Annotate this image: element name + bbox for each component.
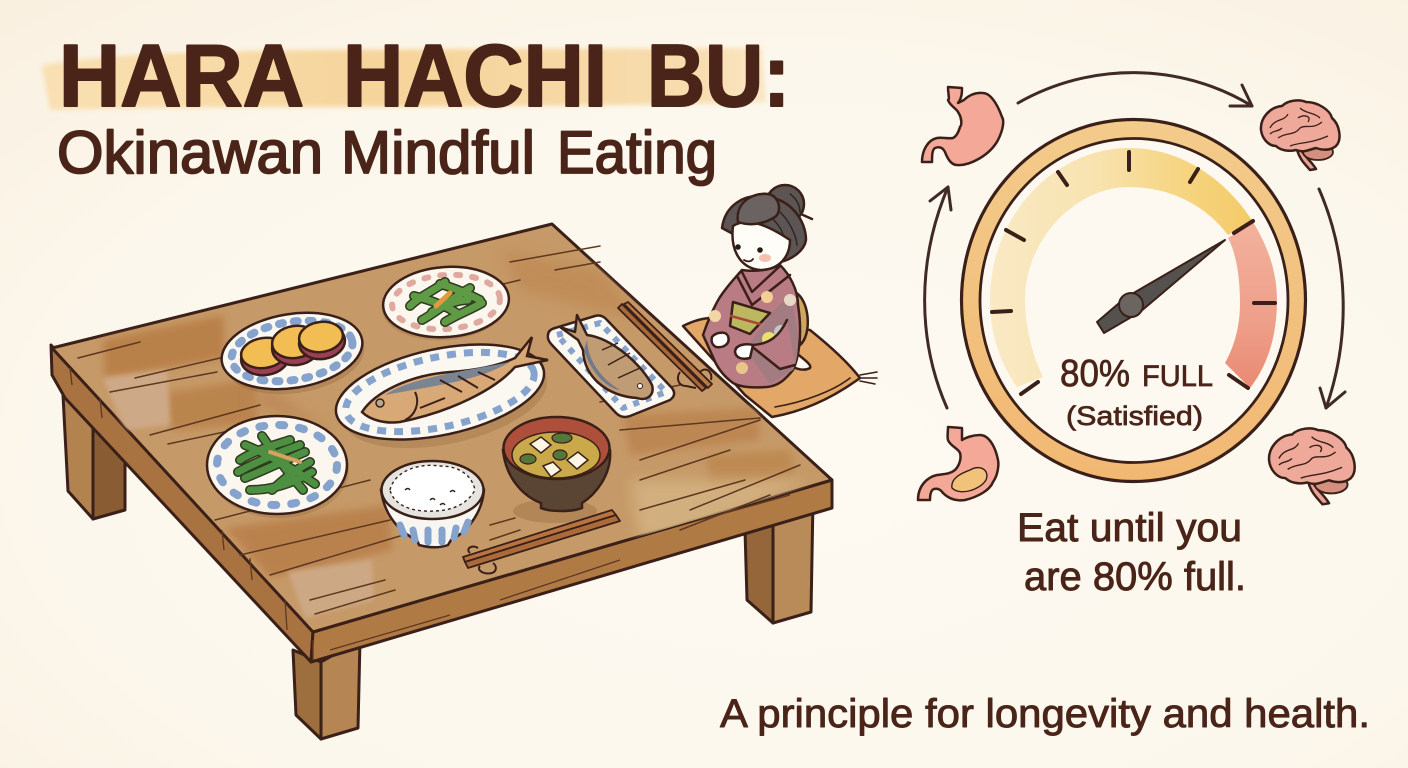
rice bowl — [381, 461, 484, 547]
kimono — [703, 265, 800, 387]
subtitle: Okinawan — [57, 119, 323, 186]
tagline: A principle for longevity and health. — [720, 692, 1370, 736]
plate: large fish — [327, 328, 556, 465]
gauge band: red — [1225, 222, 1277, 388]
caption: eat until — [1017, 506, 1246, 599]
title: BU: — [647, 26, 790, 125]
loop arrow: brain downward — [1319, 189, 1345, 408]
icon: brain bottom — [1269, 428, 1355, 504]
gauge reading: (Satisfied) — [1066, 401, 1203, 431]
front hair — [738, 194, 779, 224]
title highlight — [42, 48, 766, 110]
plate: rectangular with small fish — [548, 315, 674, 417]
seat back — [795, 292, 808, 345]
table leg: front — [293, 640, 360, 739]
gauge ticks — [992, 152, 1275, 394]
subtitle: Eating — [557, 119, 717, 186]
title: HARA — [59, 26, 304, 125]
loop arrow: stomach upward — [925, 187, 951, 408]
plate: lower greens — [207, 416, 349, 518]
loop arrow: stomach to brain — [1018, 73, 1252, 106]
hair back and bun — [722, 185, 812, 262]
sleeve and hands — [712, 320, 795, 369]
foot — [788, 352, 810, 370]
stomach contents — [952, 468, 987, 492]
miso soup — [512, 432, 600, 478]
table left face — [51, 345, 313, 662]
table leg: back left — [63, 395, 125, 519]
gauge face — [980, 138, 1288, 462]
title — [59, 26, 790, 125]
caption: eat until: Eat until you — [1017, 506, 1242, 550]
obi — [730, 302, 770, 334]
chopstick rest — [468, 547, 496, 573]
table plank seams — [70, 368, 790, 660]
green beans — [238, 436, 315, 490]
green beans — [410, 282, 482, 322]
table wood patches — [103, 250, 810, 618]
chopstick rest — [678, 370, 711, 388]
kimono flowers — [709, 291, 796, 374]
chopsticks: right — [618, 302, 712, 391]
gauge reading: FULL — [1142, 360, 1213, 393]
title: HACHI — [343, 26, 607, 125]
cushion and seated woman — [683, 185, 877, 417]
table top — [52, 224, 832, 632]
fullness gauge — [962, 120, 1306, 482]
plate: top greens — [380, 263, 511, 344]
miso soup bowl — [503, 417, 610, 523]
subtitle — [57, 119, 717, 186]
chopsticks: front — [463, 510, 620, 573]
wood grain — [78, 246, 800, 614]
icon: empty stomach — [922, 87, 1003, 165]
gauge outer ring — [962, 120, 1306, 482]
icon: brain top — [1261, 100, 1339, 170]
collar — [737, 266, 790, 305]
table right face — [311, 480, 832, 662]
cushion — [683, 318, 877, 417]
wooden table — [51, 224, 832, 739]
gauge reading: 80% — [1060, 353, 1130, 395]
grilled fish — [362, 337, 548, 423]
gauge reading — [1060, 353, 1213, 431]
table leg: right — [745, 500, 813, 623]
sweet potato slices — [239, 319, 347, 378]
subtitle: Mindful — [341, 119, 535, 186]
caption: eat until: are 80% full. — [1024, 555, 1246, 599]
plate: sweet potato — [216, 303, 370, 404]
face — [732, 222, 790, 270]
gauge band: yellow — [990, 148, 1253, 387]
icon: stomach with food — [918, 427, 998, 500]
rice — [390, 465, 475, 511]
small fish — [560, 315, 653, 399]
gauge needle — [1097, 240, 1225, 333]
